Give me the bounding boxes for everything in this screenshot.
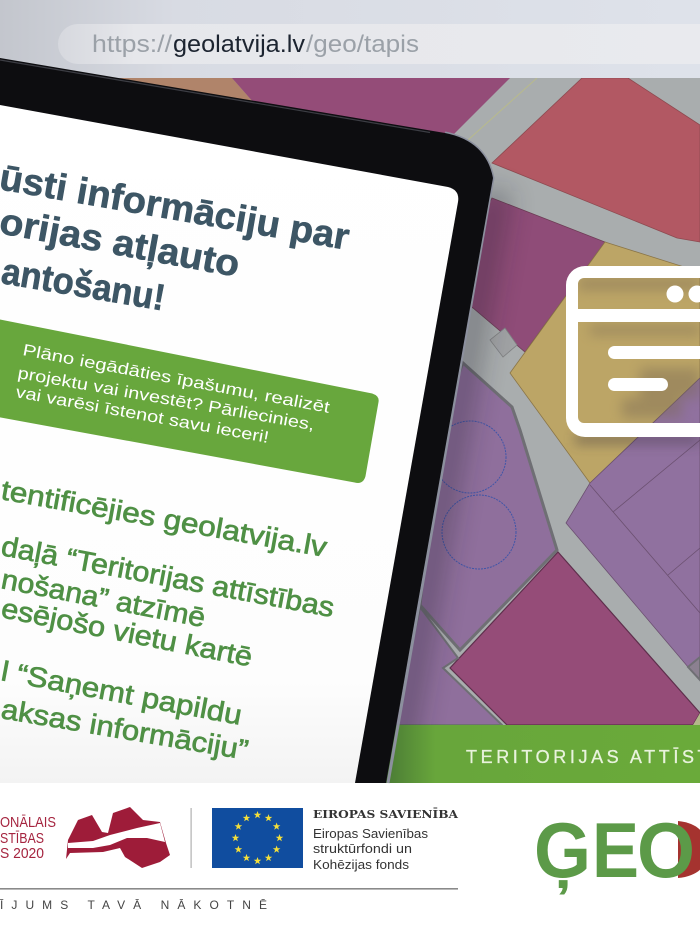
url text: https:// [92,31,172,58]
step 2: esējošo vietu kartē [0,592,255,672]
logo letters: O [637,806,695,894]
EU text block: Kohēzijas fonds [313,857,410,872]
logo letters: Ģ [534,806,591,895]
browser bar [0,0,700,78]
step 2: daļā “Teritorijas attīstības [0,530,337,623]
callout text: Plāno iegādāties īpašumu, realizēt [21,341,332,417]
icon inner shading [575,278,700,444]
parcel: tan centre [510,242,700,483]
callout text: projektu vai investēt? Pārliecinies, [16,364,316,434]
red arcs [678,821,700,878]
parcel: red [492,78,700,242]
EU text block: EIROPAS SAVIENĪBA [313,808,459,821]
parcel: magenta left [472,198,606,352]
regional programme label [0,814,56,862]
parcel: purple right [566,378,700,667]
logo letters: E [592,806,639,894]
parcel: purple with circles [420,363,557,650]
footer slogan: ĪJUMS TAVĀ NĀKOTNĒ [0,898,267,912]
icon text lines [608,346,700,359]
instruction steps [0,474,337,766]
url text: geolatvija.lv [173,31,305,58]
logo divider [190,808,192,868]
headline: antošanu! [0,250,168,318]
tablet [0,58,493,783]
small corner plot [688,657,700,680]
step 3: aksas informāciju” [0,693,251,766]
tablet top highlight [0,60,430,132]
blue circles [434,421,516,569]
icon frame [566,266,700,437]
white band [68,823,165,848]
EU flag [212,808,303,868]
footer rule [0,888,458,890]
EU text block: Eiropas Savienības [313,826,429,841]
green callout [0,319,377,481]
tablet screen [0,105,458,783]
map background [118,78,700,725]
url text [92,31,419,58]
window icon [566,266,700,444]
headline: orijas atļauto [0,201,243,286]
regional programme label: S 2020 [0,845,44,862]
headline: ūsti informāciju par [0,156,352,258]
regional programme label: STĪBAS [0,830,44,847]
step 3: l “Saņemt papildu [0,655,244,731]
regional programme label: ONĀLAIS [0,814,56,831]
callout text: vai varēsi īstenot savu ieceri! [14,383,270,447]
green banner [385,725,700,783]
road centre line [468,78,537,140]
headline [0,156,352,318]
step 2 [0,530,337,672]
step 2: nošana” atzīmē [0,563,208,633]
EU text block: struktūrfondi un [313,841,412,856]
EU text block [313,808,459,872]
step 3 [0,655,251,766]
callout text [14,341,332,447]
address field [58,24,700,64]
icon header divider [578,309,700,322]
parcel: tan top [120,78,252,100]
callout box [0,319,377,481]
stars [232,811,283,864]
icon dots [666,286,684,302]
step 1: tentificējies geolatvija.lv [0,474,329,563]
tablet edge [388,133,493,783]
url text: /geo/tapis [306,31,419,58]
GEO logo [534,806,700,895]
logo letters [534,806,695,895]
parcel dividers [590,440,700,613]
small grey plot [490,328,517,357]
tablet shadow [392,190,497,790]
icon: Latvia map [66,807,170,868]
parcel: purple lower left [395,607,502,725]
parcel: magenta top [232,78,510,138]
tablet body [0,58,493,783]
parcel: large magenta [450,552,700,725]
